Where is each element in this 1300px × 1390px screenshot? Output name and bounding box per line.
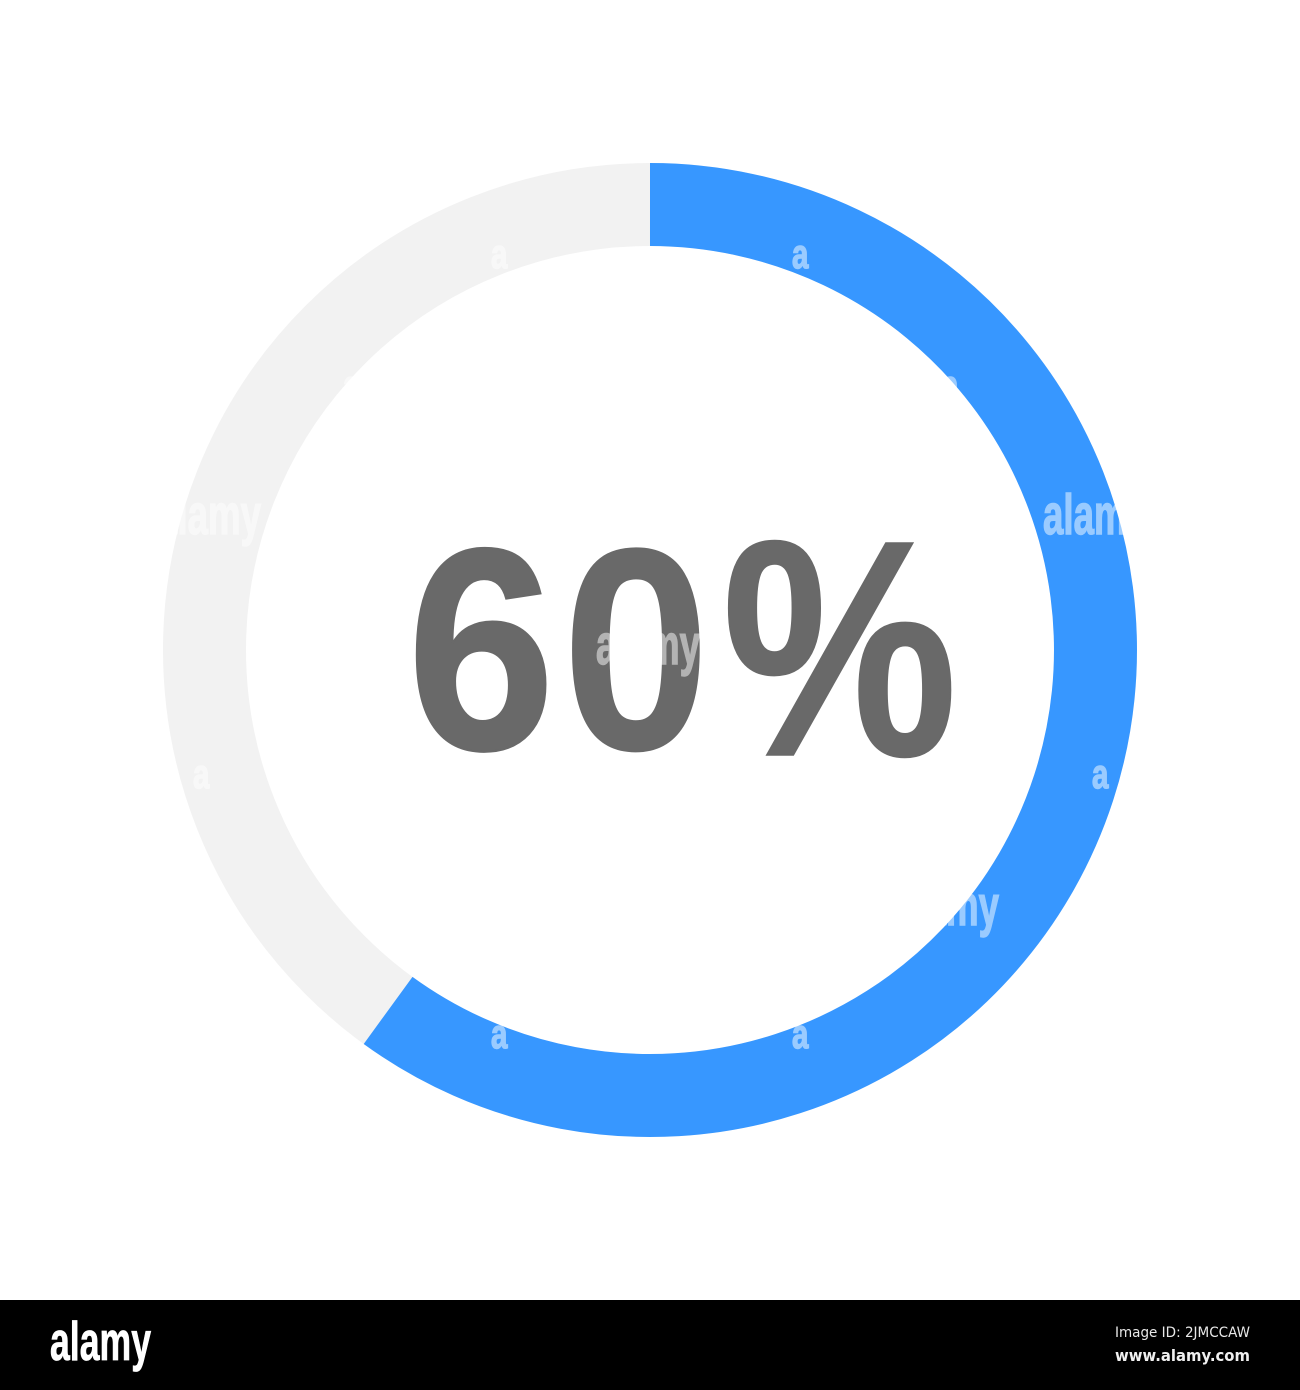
digit 0: 0: [562, 488, 710, 810]
percent sign: %: [722, 476, 958, 820]
footer logo: alamy: [50, 1310, 151, 1372]
watermark: a: [491, 1011, 508, 1057]
watermark: a: [491, 231, 508, 277]
image id: Image ID: 2JMCCAW: [1115, 1325, 1250, 1341]
digit 6: 6: [407, 488, 555, 810]
remaining track arc (40%): [204, 204, 1096, 1096]
watermark: alamy: [895, 874, 999, 938]
watermark: a: [193, 751, 210, 797]
watermark: a: [792, 1011, 809, 1057]
watermark: alamy: [1043, 483, 1147, 547]
percentage label: [407, 476, 958, 820]
watermark: a: [343, 362, 360, 408]
watermark: alamy: [157, 483, 261, 547]
watermark: a: [792, 231, 809, 277]
watermark: [157, 231, 1147, 1057]
site url: www.alamy.com: [1115, 1346, 1250, 1365]
watermark: a: [1092, 751, 1109, 797]
progress arc (60%): [388, 204, 1095, 1095]
footer bar: [0, 1300, 1300, 1390]
watermark: a: [942, 362, 959, 408]
watermark: alamy: [596, 613, 700, 677]
